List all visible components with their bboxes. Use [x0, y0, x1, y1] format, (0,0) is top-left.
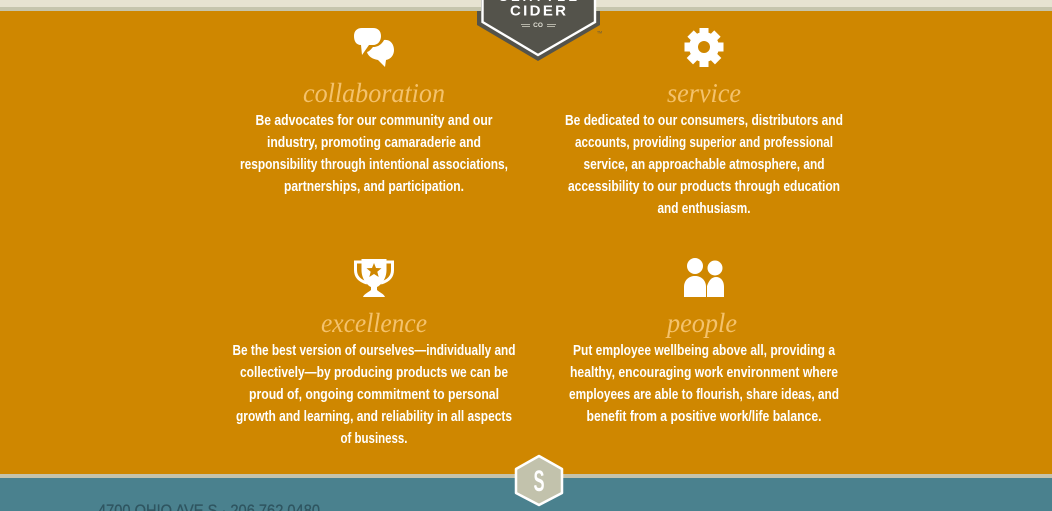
icon: trophy	[356, 259, 392, 297]
text: people body: Put employee wellbeing above all, providing a	[573, 343, 836, 359]
text: service body	[565, 113, 843, 217]
text: service body: Be dedicated to our consumers, distributors and	[565, 113, 843, 129]
logo badge: CIDER	[510, 2, 566, 20]
text: service body: accessibility to our products through education	[568, 179, 840, 195]
panel: service	[565, 28, 843, 217]
text: excellence body: growth and learning, and reliability in all aspects	[236, 409, 512, 425]
heading: collaboration: collaboration	[303, 78, 445, 108]
heading: service: service	[667, 78, 741, 108]
icon: people	[684, 258, 724, 297]
heading: excellence: excellence	[321, 308, 427, 338]
panel: collaboration	[240, 28, 508, 195]
text: people body	[569, 343, 839, 425]
text: people body: benefit from a positive work/life balance.	[586, 409, 822, 425]
panel: excellence	[232, 259, 516, 447]
icon: speech bubbles	[354, 28, 394, 67]
panel: people	[569, 258, 839, 425]
text: service body: and enthusiasm.	[658, 201, 750, 217]
text: collaboration body	[240, 113, 508, 195]
text: collaboration body: industry, promoting camaraderie and	[267, 135, 481, 151]
text: collaboration body: Be advocates for our community and our	[256, 113, 493, 129]
text: service body: accounts, providing superior and professional	[575, 135, 833, 151]
text: excellence body: proud of, ongoing commitment to personal	[249, 387, 499, 403]
heading: people: people	[665, 308, 737, 338]
icon: gear	[684, 28, 724, 67]
text: people body: employees are able to flourish, share ideas, and	[569, 387, 839, 403]
text: people body: healthy, encouraging work environment where	[570, 365, 838, 381]
text: excellence body: Be the best version of ourselves—individually and	[232, 343, 516, 359]
text: excellence body: collectively—by producing products we can be	[240, 365, 508, 381]
icon: S hexagon badge: S	[533, 465, 545, 498]
text: collaboration body: responsibility through intentional associations,	[240, 157, 508, 173]
logo badge: TM	[597, 30, 602, 34]
logo badge	[477, 0, 602, 61]
text: service body: service, an approachable atmosphere, and	[584, 157, 824, 173]
text: excellence body	[232, 343, 516, 447]
icon: S hexagon badge	[516, 456, 562, 505]
text: collaboration body: partnerships, and participation.	[284, 179, 464, 195]
logo badge: CO	[533, 22, 543, 29]
text: excellence body: of business.	[340, 431, 408, 447]
